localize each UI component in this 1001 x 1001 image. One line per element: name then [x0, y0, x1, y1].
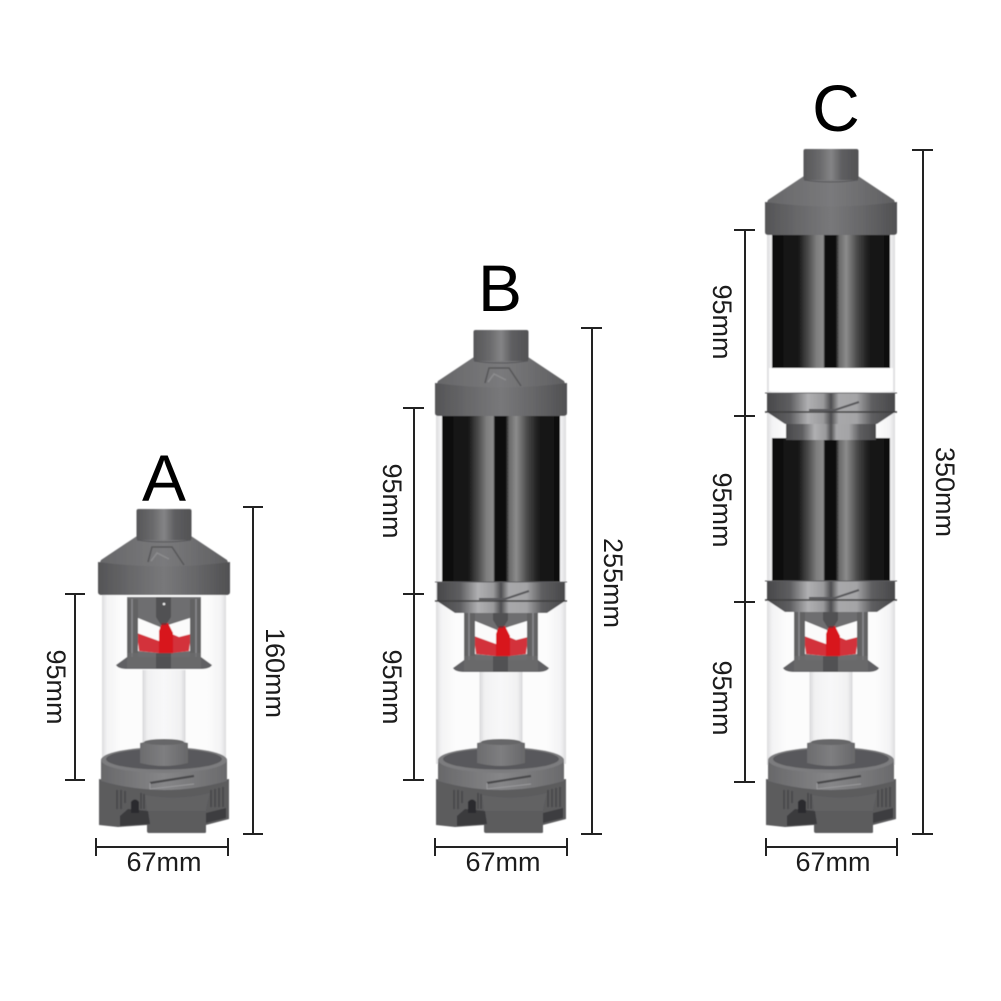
dimension label 67mm: 67mm [795, 847, 871, 877]
height bracket 95mm [65, 594, 85, 780]
dimensions: filter C [707, 150, 960, 877]
height bracket 255mm [581, 328, 602, 834]
height bracket 160mm [243, 507, 263, 834]
width bracket 67mm [435, 838, 567, 856]
label: A: A [142, 441, 186, 515]
dimension label 95mm: 95mm [41, 649, 71, 725]
product: filter C [765, 149, 897, 833]
dimension label 67mm: 67mm [465, 847, 541, 877]
dimension label 350mm: 350mm [930, 447, 960, 537]
dimension label 255mm: 255mm [598, 538, 628, 628]
dimension label bottom 95mm: 95mm [707, 660, 737, 736]
dimension label top 95mm: 95mm [707, 284, 737, 360]
width bracket 67mm [766, 838, 897, 856]
product: filter B [435, 330, 567, 833]
dimensions: filter B [377, 328, 628, 877]
dimension label middle 95mm: 95mm [707, 472, 737, 548]
height bracket 350mm [912, 150, 933, 834]
dimensions: filter A [41, 507, 290, 877]
dimension label 67mm: 67mm [126, 847, 202, 877]
width bracket 67mm [96, 838, 228, 856]
product: filter A [98, 509, 230, 833]
dimension label 160mm: 160mm [260, 628, 290, 718]
dimension label lower 95mm: 95mm [377, 649, 407, 725]
height bracket 95mm x2 [403, 408, 424, 780]
label: B: B [478, 251, 522, 325]
label: C: C [812, 71, 860, 145]
height bracket 95mm x3 [734, 230, 755, 782]
dimension label upper 95mm: 95mm [377, 463, 407, 539]
